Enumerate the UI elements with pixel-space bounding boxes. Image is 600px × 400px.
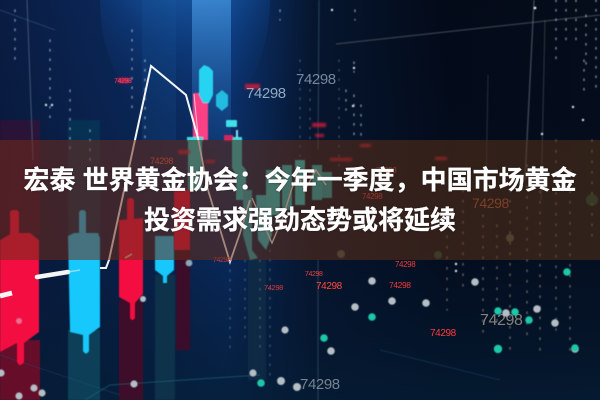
price labels: 74298 xyxy=(316,281,343,292)
price labels: 74298 xyxy=(395,260,416,269)
title: 宏泰 世界黄金协会：今年一季度，中国市场黄金 xyxy=(23,165,577,195)
candlestick: large cyan xyxy=(68,210,100,354)
price labels: 74298 xyxy=(213,257,231,264)
price labels: 74298 xyxy=(362,192,383,201)
candlestick: large red xyxy=(0,210,39,365)
price labels: 74298 xyxy=(430,328,457,339)
price labels: 74298 xyxy=(296,71,336,88)
white trend line xyxy=(0,66,326,296)
price labels: 74298 xyxy=(264,283,283,292)
price labels: 74298 xyxy=(376,166,397,175)
price labels: 74298 xyxy=(305,271,323,278)
title xyxy=(23,165,577,235)
translucent title band xyxy=(0,140,600,260)
price labels: 74298 xyxy=(480,312,523,329)
price labels: 74298 xyxy=(150,156,173,166)
price labels: 74298 xyxy=(389,280,411,290)
price labels: 74298 xyxy=(114,78,132,85)
price labels: 74298 xyxy=(472,195,510,211)
candlesticks: upper cluster xyxy=(187,65,242,141)
candlesticks: teal cluster in band xyxy=(188,140,332,260)
candlestick: small red xyxy=(174,190,190,250)
price labels: 74298 xyxy=(300,376,340,393)
faint background columns xyxy=(0,120,266,400)
title: 投资需求强劲态势或将延续 xyxy=(144,205,456,235)
candlestick: small cyan xyxy=(155,236,174,283)
candlestick: medium red xyxy=(119,198,143,320)
price labels xyxy=(114,71,523,393)
price labels: 74298 xyxy=(246,85,286,102)
red scattered blocks xyxy=(118,78,447,163)
